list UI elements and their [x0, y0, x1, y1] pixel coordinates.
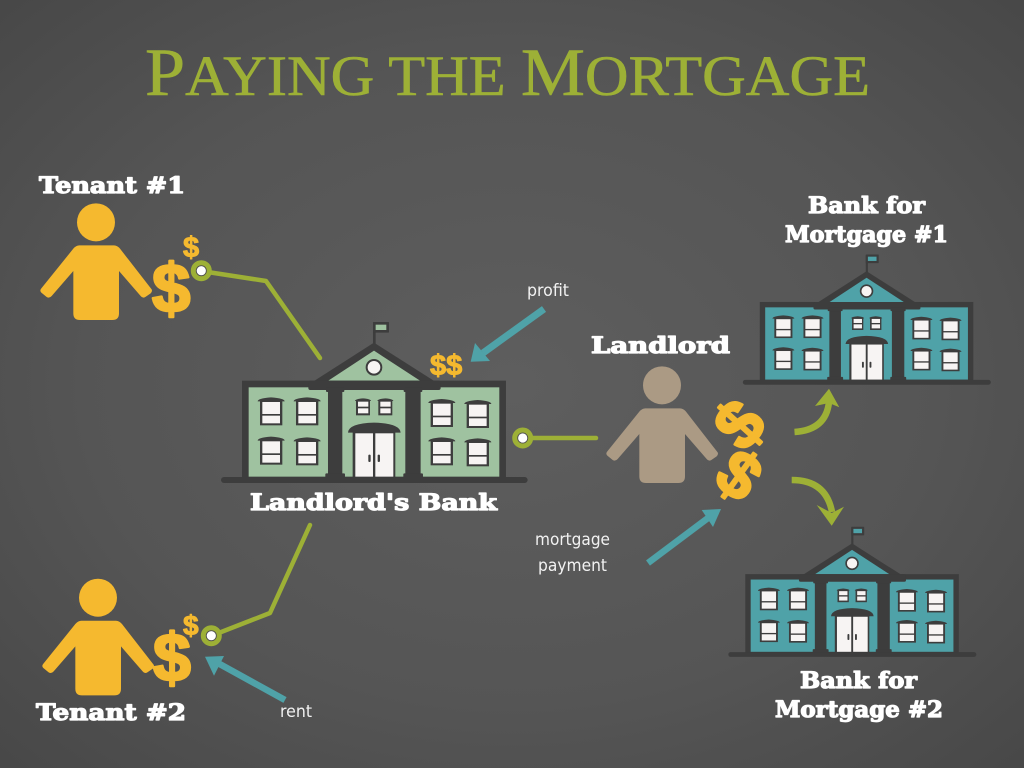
label: profit: profit: [527, 281, 569, 301]
heading: Bank for Mortgage #1: Mortgage #1: [785, 222, 948, 248]
heading: Landlord: Landlord: [591, 333, 730, 359]
icon: tenant 2 small dollar: $: [183, 610, 199, 641]
connector: tenant 1 to bank: [193, 263, 320, 358]
arrow: mortgage payment: [648, 509, 721, 563]
arrow: green up to bank 1: [794, 389, 839, 432]
icon: tenant 2 person: [42, 579, 154, 695]
heading: Bank for Mortgage #2: Mortgage #2: [775, 697, 943, 723]
icon: tenant 1 small dollar: $: [183, 232, 199, 264]
icon: tenant 1 person: [40, 203, 152, 320]
arrow: rent: [205, 656, 285, 700]
icon: mortgage bank 1 building: [743, 255, 991, 385]
connector: tenant 2 to bank: [203, 525, 310, 644]
icon: mortgage bank 2 building: [728, 527, 976, 657]
heading: Bank for Mortgage #1: Bank for: [808, 193, 925, 219]
label: mortgage payment: mortgage: [535, 530, 610, 550]
title: PAYING THE MORTGAGE: [145, 34, 870, 110]
heading: Tenant #1: Tenant #1: [39, 173, 185, 199]
heading: Bank for Mortgage #2: [775, 668, 943, 723]
label: mortgage payment: payment: [538, 556, 607, 576]
icon: landlord upper dollar: $: [699, 385, 781, 464]
icon: tenant 2 large dollar: $: [153, 620, 191, 696]
connector: bank to landlord: [515, 430, 596, 446]
heading: Bank for Mortgage #1: [785, 193, 948, 248]
arrow: green down to bank 2: [792, 480, 844, 526]
icon: landlord lower dollar: $: [703, 434, 776, 516]
heading: Landlord's Bank: Landlord's Bank: [250, 490, 498, 516]
heading: Bank for Mortgage #2: Bank for: [800, 668, 917, 694]
heading: Tenant #2: Tenant #2: [36, 700, 186, 726]
label: rent: rent: [280, 702, 312, 722]
icon: landlord's bank building: [221, 322, 528, 483]
icon: bank dollars: $$: [430, 350, 462, 382]
arrow: profit: [471, 309, 544, 362]
label: mortgage payment: [535, 530, 610, 576]
icon: landlord person: [606, 366, 718, 483]
icon: tenant 1 large dollar: $: [152, 250, 190, 327]
